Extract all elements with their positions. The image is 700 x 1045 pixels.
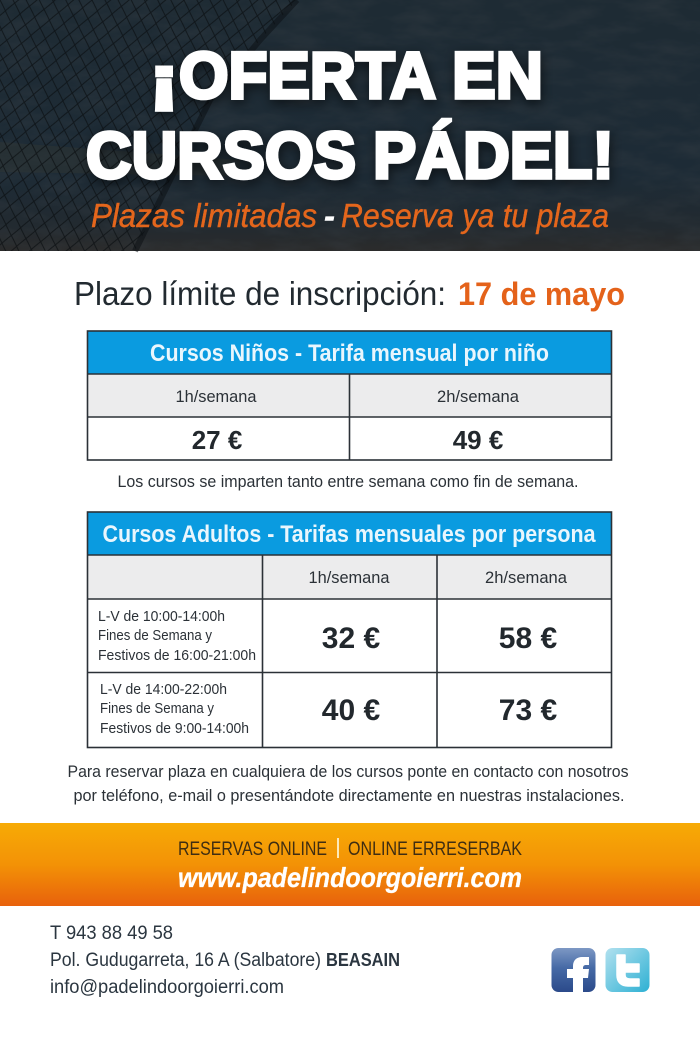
table: children courses: 49 € <box>453 425 503 455</box>
table: children courses: 2h/semana <box>437 387 520 406</box>
table: children courses <box>88 331 612 460</box>
adult table header <box>88 512 612 555</box>
contact details: T 943 88 49 58 <box>50 923 173 944</box>
icon: twitter <box>606 948 650 992</box>
title: ¡ <box>149 45 179 114</box>
table: children courses: 1h/semana <box>176 387 257 406</box>
booking note: Para reservar plaza en cualquiera de los cursos ponte en contacto con nosotros <box>68 762 628 781</box>
booking note <box>68 762 628 805</box>
deadline heading: Plazo límite de inscripción: <box>74 275 446 312</box>
schedule row 2: Festivos de 9:00-14:00h <box>100 720 249 737</box>
children note: Los cursos se imparten tanto entre semana como fin de semana. <box>118 472 578 491</box>
children table header: Cursos Niños - Tarifa mensual por niño <box>150 340 549 367</box>
booking note: por teléfono, e-mail o presentándote directamente en nuestras instalaciones. <box>74 786 624 805</box>
schedule row 2: L-V de 14:00-22:00h <box>100 681 227 698</box>
table: adult courses: 32 € <box>322 622 381 655</box>
table: adult courses: 1h/semana <box>308 568 390 587</box>
contact details: Pol. Gudugarreta, 16 A (Salbatore) <box>50 950 321 971</box>
subtitle: - <box>324 197 335 234</box>
title: CURSOS <box>86 118 356 192</box>
icon: facebook <box>552 948 596 992</box>
table: adult courses: 73 € <box>499 694 558 727</box>
schedule row 1 <box>98 608 256 664</box>
contact details: BEASAIN <box>326 950 400 970</box>
subtitle: Reserva ya tu plaza <box>341 197 609 234</box>
table: adult courses: 40 € <box>322 694 381 727</box>
schedule row 1: Festivos de 16:00-21:00h <box>98 647 256 664</box>
contact details: info@padelindoorgoierri.com <box>50 977 284 998</box>
table: adult courses: 58 € <box>499 622 558 655</box>
schedule row 1: Fines de Semana y <box>98 627 212 644</box>
schedule row 1: L-V de 10:00-14:00h <box>98 608 225 625</box>
title: EN <box>452 38 543 112</box>
schedule row 2 <box>100 681 249 737</box>
orange online booking band: RESERVAS ONLINE <box>178 839 327 860</box>
table: adult courses: 2h/semana <box>485 568 568 587</box>
hero banner <box>0 0 700 251</box>
orange online booking band <box>0 823 700 906</box>
title: OFERTA <box>179 38 436 112</box>
subtitle: Plazas limitadas <box>91 197 317 234</box>
title <box>86 38 614 192</box>
children table header <box>88 331 612 374</box>
title: PÁDEL! <box>373 118 614 192</box>
table: children courses: 27 € <box>192 425 242 455</box>
deadline heading: 17 de mayo <box>458 276 625 312</box>
orange online booking band: www.padelindoorgoierri.com <box>178 862 522 893</box>
contact details <box>50 923 400 998</box>
table: adult courses <box>88 512 612 748</box>
subtitle <box>91 197 609 234</box>
schedule row 2: Fines de Semana y <box>100 700 214 717</box>
orange online booking band: ONLINE ERRESERBAK <box>348 839 522 860</box>
adult table header: Cursos Adultos - Tarifas mensuales por persona <box>102 521 596 548</box>
